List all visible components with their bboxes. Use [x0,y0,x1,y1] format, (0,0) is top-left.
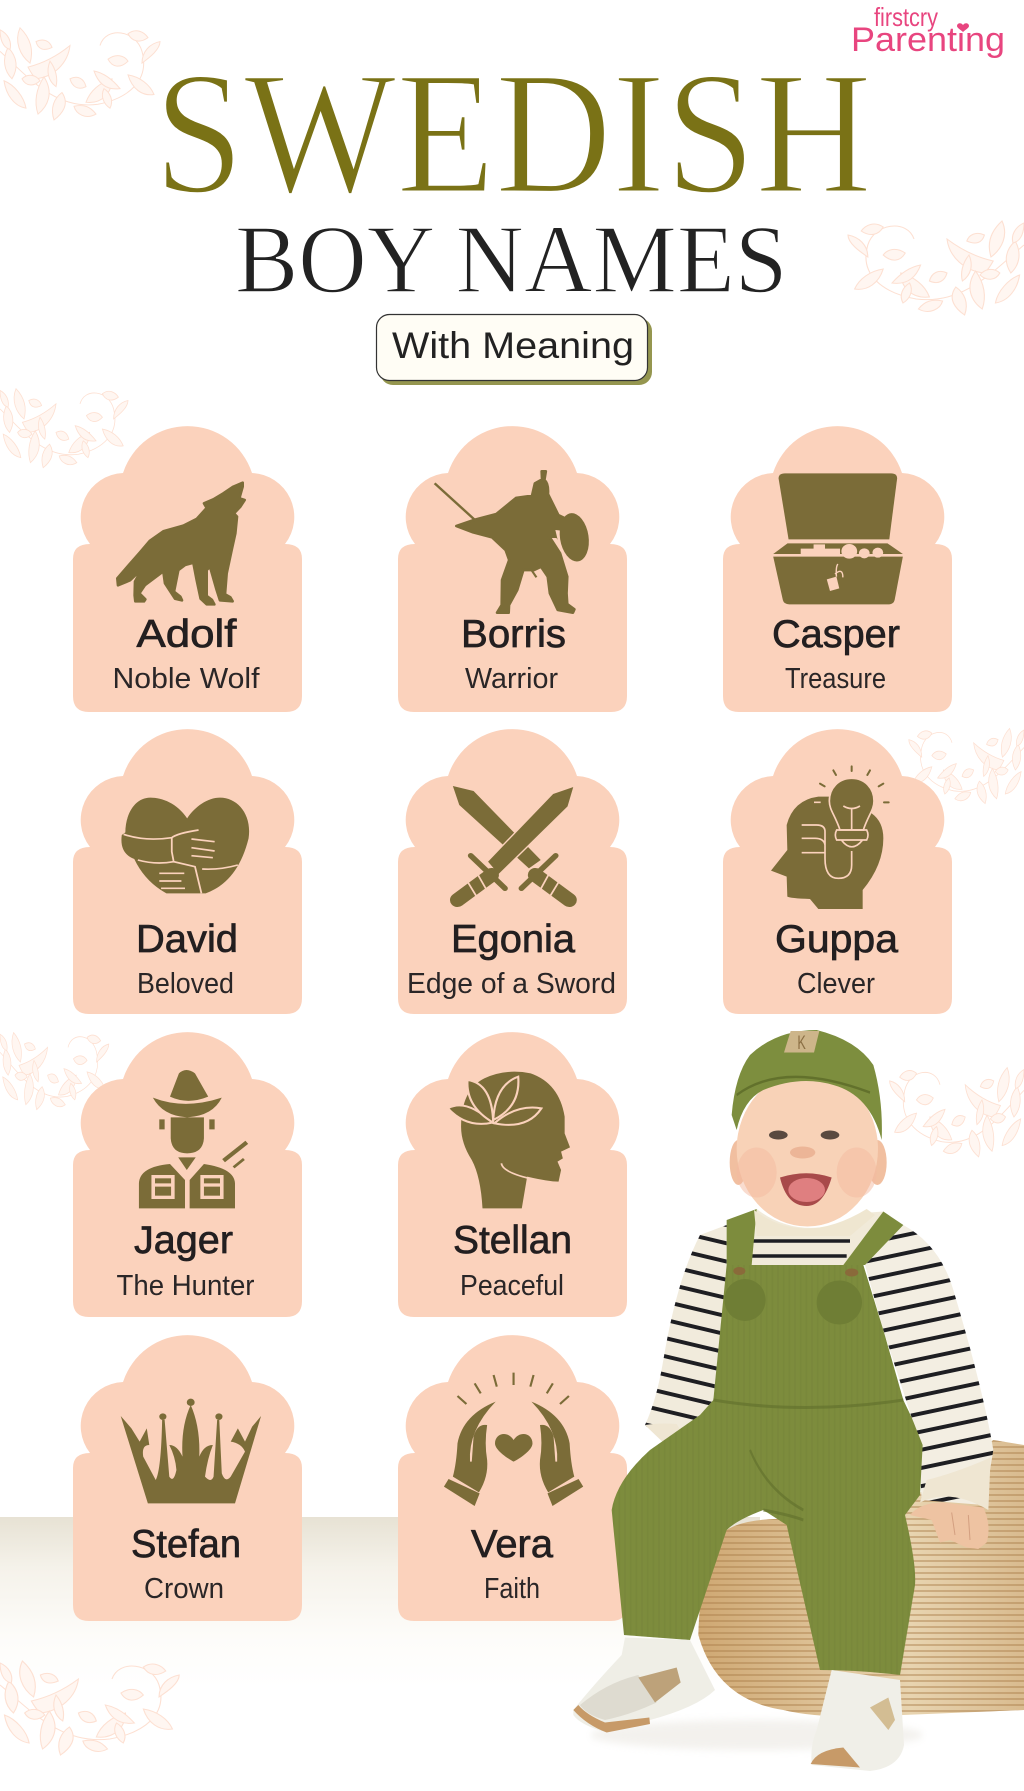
name: Guppa [775,918,898,961]
name: Jager [134,1219,233,1262]
bear ears and buttons [724,1279,766,1321]
name: Vera [471,1523,553,1566]
name: David [136,918,238,961]
head [730,1140,747,1185]
ornament: right row two [909,728,1024,804]
straps [727,1209,757,1265]
hand [910,1502,989,1549]
name: Casper [772,613,900,656]
panel: Egonia [398,729,627,1014]
meaning: Crown [144,1573,224,1605]
overalls [612,1265,923,1675]
hat badge [784,1031,819,1054]
subtitle text: With Meaning [392,325,634,366]
icon: crown [121,1399,261,1503]
panel: Casper [723,426,952,712]
face [769,1130,788,1140]
icon: heart with hugging hands [121,798,249,893]
name: Stefan [131,1523,241,1566]
panel: Stefan [73,1335,302,1621]
meaning: Peaceful [460,1270,564,1302]
icon: treasure chest [773,473,903,604]
title [154,35,872,313]
logo: FirstCry Parenting: Parenting [851,21,1005,59]
collar [754,1209,875,1236]
ornament: left row three [0,1033,109,1110]
subtitle button [376,314,652,385]
logo: FirstCry Parenting [851,2,1005,59]
meaning: The Hunter [116,1270,255,1302]
name: Stellan [453,1219,572,1262]
panel: Stellan [398,1032,627,1317]
panel: David [73,729,302,1014]
ornament: bottom left [0,1661,179,1755]
ornament: upper right [848,221,1024,315]
meaning: Treasure [785,663,886,695]
panel: Borris [398,426,627,712]
panel: Jager [73,1032,302,1317]
ornament: right row three [890,1068,1024,1157]
name: Borris [461,613,566,656]
meaning: Warrior [465,663,558,695]
icon: head with lotus [448,1072,570,1208]
panel: Adolf [73,426,302,712]
logo: FirstCry Parenting: firstcry [874,2,938,32]
meaning: Beloved [137,968,234,1000]
heading: Swedish: SWEDISH [154,35,872,231]
meaning: Noble Wolf [112,663,260,695]
name: Adolf [136,613,237,656]
hat badge: K [797,1033,806,1054]
striped sleeves [645,1225,727,1442]
icon: hands holding heart [444,1373,583,1506]
hat [732,1030,882,1140]
name: Egonia [451,918,575,961]
heading: Boy Names: BOY NAMES [235,205,788,313]
icon: howling wolf [117,483,245,604]
cuffs [645,1423,683,1442]
left shoe [573,1638,715,1732]
photo: smiling baby on wicker pouf [573,1030,1024,1771]
right shoe [811,1670,904,1771]
ornament: top left [0,28,160,120]
ornament: left row one [0,389,128,468]
meaning: Faith [484,1573,540,1605]
wicker pouf [698,1440,1024,1717]
meaning: Clever [797,968,875,1000]
icon: hunter [139,1070,247,1208]
panel: Vera [398,1335,627,1621]
floor gradient [0,1517,760,1687]
icon: warrior [435,471,592,613]
panel: Guppa [723,729,952,1014]
icon: crossed swords [453,786,574,900]
icon: head with lightbulb [771,766,889,909]
meaning: Edge of a Sword [407,968,616,1000]
